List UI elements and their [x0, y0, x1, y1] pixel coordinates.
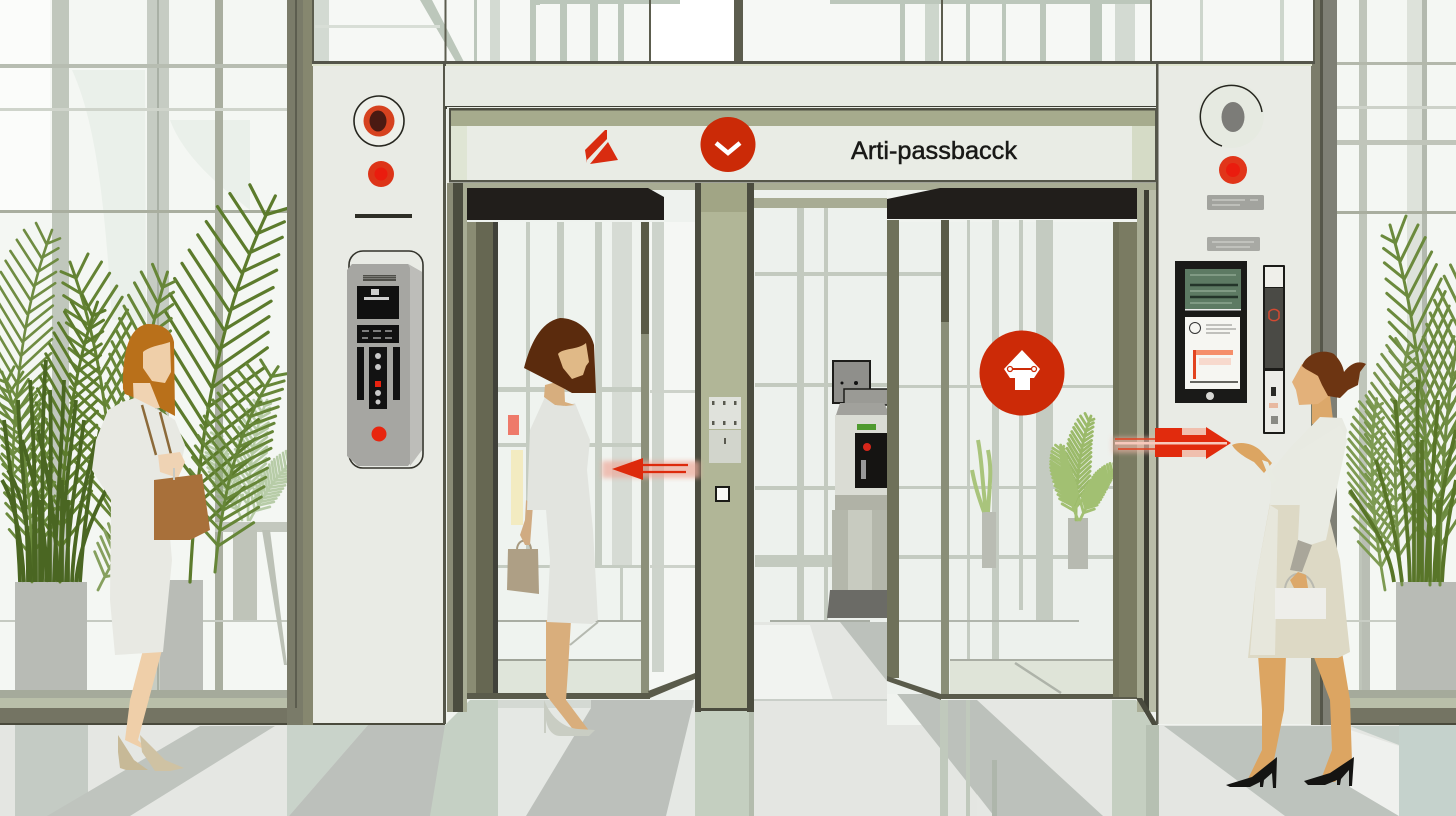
- center pillar: [695, 182, 754, 712]
- arm: [520, 500, 533, 545]
- left door frame and glass: [447, 182, 695, 712]
- legs: [546, 620, 590, 732]
- handbag: [507, 541, 539, 594]
- right arrow: red pointing right: [1112, 427, 1231, 459]
- left panel camera ring: [354, 96, 404, 146]
- kiosk screen: [855, 433, 889, 488]
- right panel sensor ring: [1198, 82, 1264, 148]
- left woman: [92, 324, 210, 771]
- sleeve arm: [1298, 425, 1347, 545]
- neck: [544, 380, 575, 406]
- white handbag: [1275, 572, 1326, 619]
- black heels: [1226, 757, 1277, 788]
- face: [558, 343, 589, 379]
- hair: [123, 324, 175, 416]
- dress: [527, 397, 598, 624]
- left door glass pane: [498, 222, 641, 696]
- device screen: [357, 286, 399, 319]
- right pot: [1396, 582, 1456, 690]
- faded background plant: [193, 397, 306, 528]
- bag strap: [142, 405, 172, 458]
- device side bars: [357, 347, 400, 409]
- left arrow: red pointing left: [602, 458, 700, 480]
- left black overhead header: [467, 188, 664, 220]
- left plants: [0, 180, 306, 690]
- shoe: [544, 700, 595, 736]
- left panel slot line: [355, 214, 412, 218]
- left window: [0, 0, 445, 726]
- right wall panel: [1156, 64, 1311, 724]
- legs: [1245, 655, 1286, 785]
- device red button: [372, 426, 386, 442]
- shoes: [118, 735, 148, 770]
- kiosk green display: [857, 424, 876, 430]
- pillar square button: [716, 487, 729, 501]
- face: [143, 342, 171, 383]
- right woman: [1226, 352, 1366, 788]
- dress bodice: [1270, 417, 1347, 505]
- right window: [1312, 0, 1456, 726]
- sign logo icon: [585, 130, 618, 164]
- left frame post: [287, 0, 313, 725]
- right black overhead header: [887, 188, 1137, 219]
- tall wall reader: [1263, 265, 1285, 434]
- right frame post: [1311, 0, 1337, 725]
- neck: [133, 383, 160, 408]
- distant sign: [508, 415, 519, 435]
- reaching arm: [1232, 443, 1272, 473]
- notice paper: [1185, 317, 1240, 389]
- pot left: [15, 582, 87, 690]
- open door leaf: [650, 222, 695, 690]
- grey plate two: [1207, 237, 1260, 251]
- right door frame and glass: [753, 182, 1158, 725]
- legs: [125, 650, 162, 752]
- pillar keypad: [709, 397, 741, 463]
- background window bars: [755, 208, 887, 620]
- device key row: [357, 325, 399, 343]
- hair and bun: [1302, 352, 1366, 398]
- top transom windows: [312, 0, 1315, 66]
- middle woman: [507, 318, 598, 736]
- pot right: [160, 580, 203, 690]
- right door posts: [887, 220, 899, 678]
- upper header band: [445, 66, 1158, 109]
- device label: [363, 275, 396, 281]
- fronds: [0, 180, 289, 604]
- hand: [158, 452, 185, 478]
- access control device: [347, 251, 423, 468]
- brown bag: [154, 474, 210, 540]
- hair: [524, 318, 596, 393]
- right plant: [1332, 216, 1456, 690]
- red down chevron badge: [700, 117, 756, 172]
- door opening backdrop: [447, 182, 890, 701]
- device indicators: [375, 353, 381, 404]
- information display panel: [1175, 261, 1247, 403]
- background kiosk: [827, 361, 890, 618]
- face: [1292, 360, 1330, 405]
- distant plants through glass: [972, 413, 1120, 569]
- dress: [92, 398, 185, 655]
- left wall panel: [313, 64, 446, 724]
- floor: [0, 622, 1456, 816]
- left panel red button: [368, 161, 394, 187]
- green screen: [1185, 269, 1241, 309]
- speckled light patch: [754, 625, 833, 700]
- dense grass: [2, 360, 112, 582]
- sign title: Arti-passbacck: [851, 137, 1017, 165]
- right panel red button: [1219, 156, 1247, 184]
- grey plate one: [1207, 195, 1264, 210]
- sign band: [447, 107, 1158, 183]
- dress skirt: [1248, 503, 1350, 658]
- neck: [1312, 395, 1333, 424]
- red circular marker on right door: [980, 330, 1064, 416]
